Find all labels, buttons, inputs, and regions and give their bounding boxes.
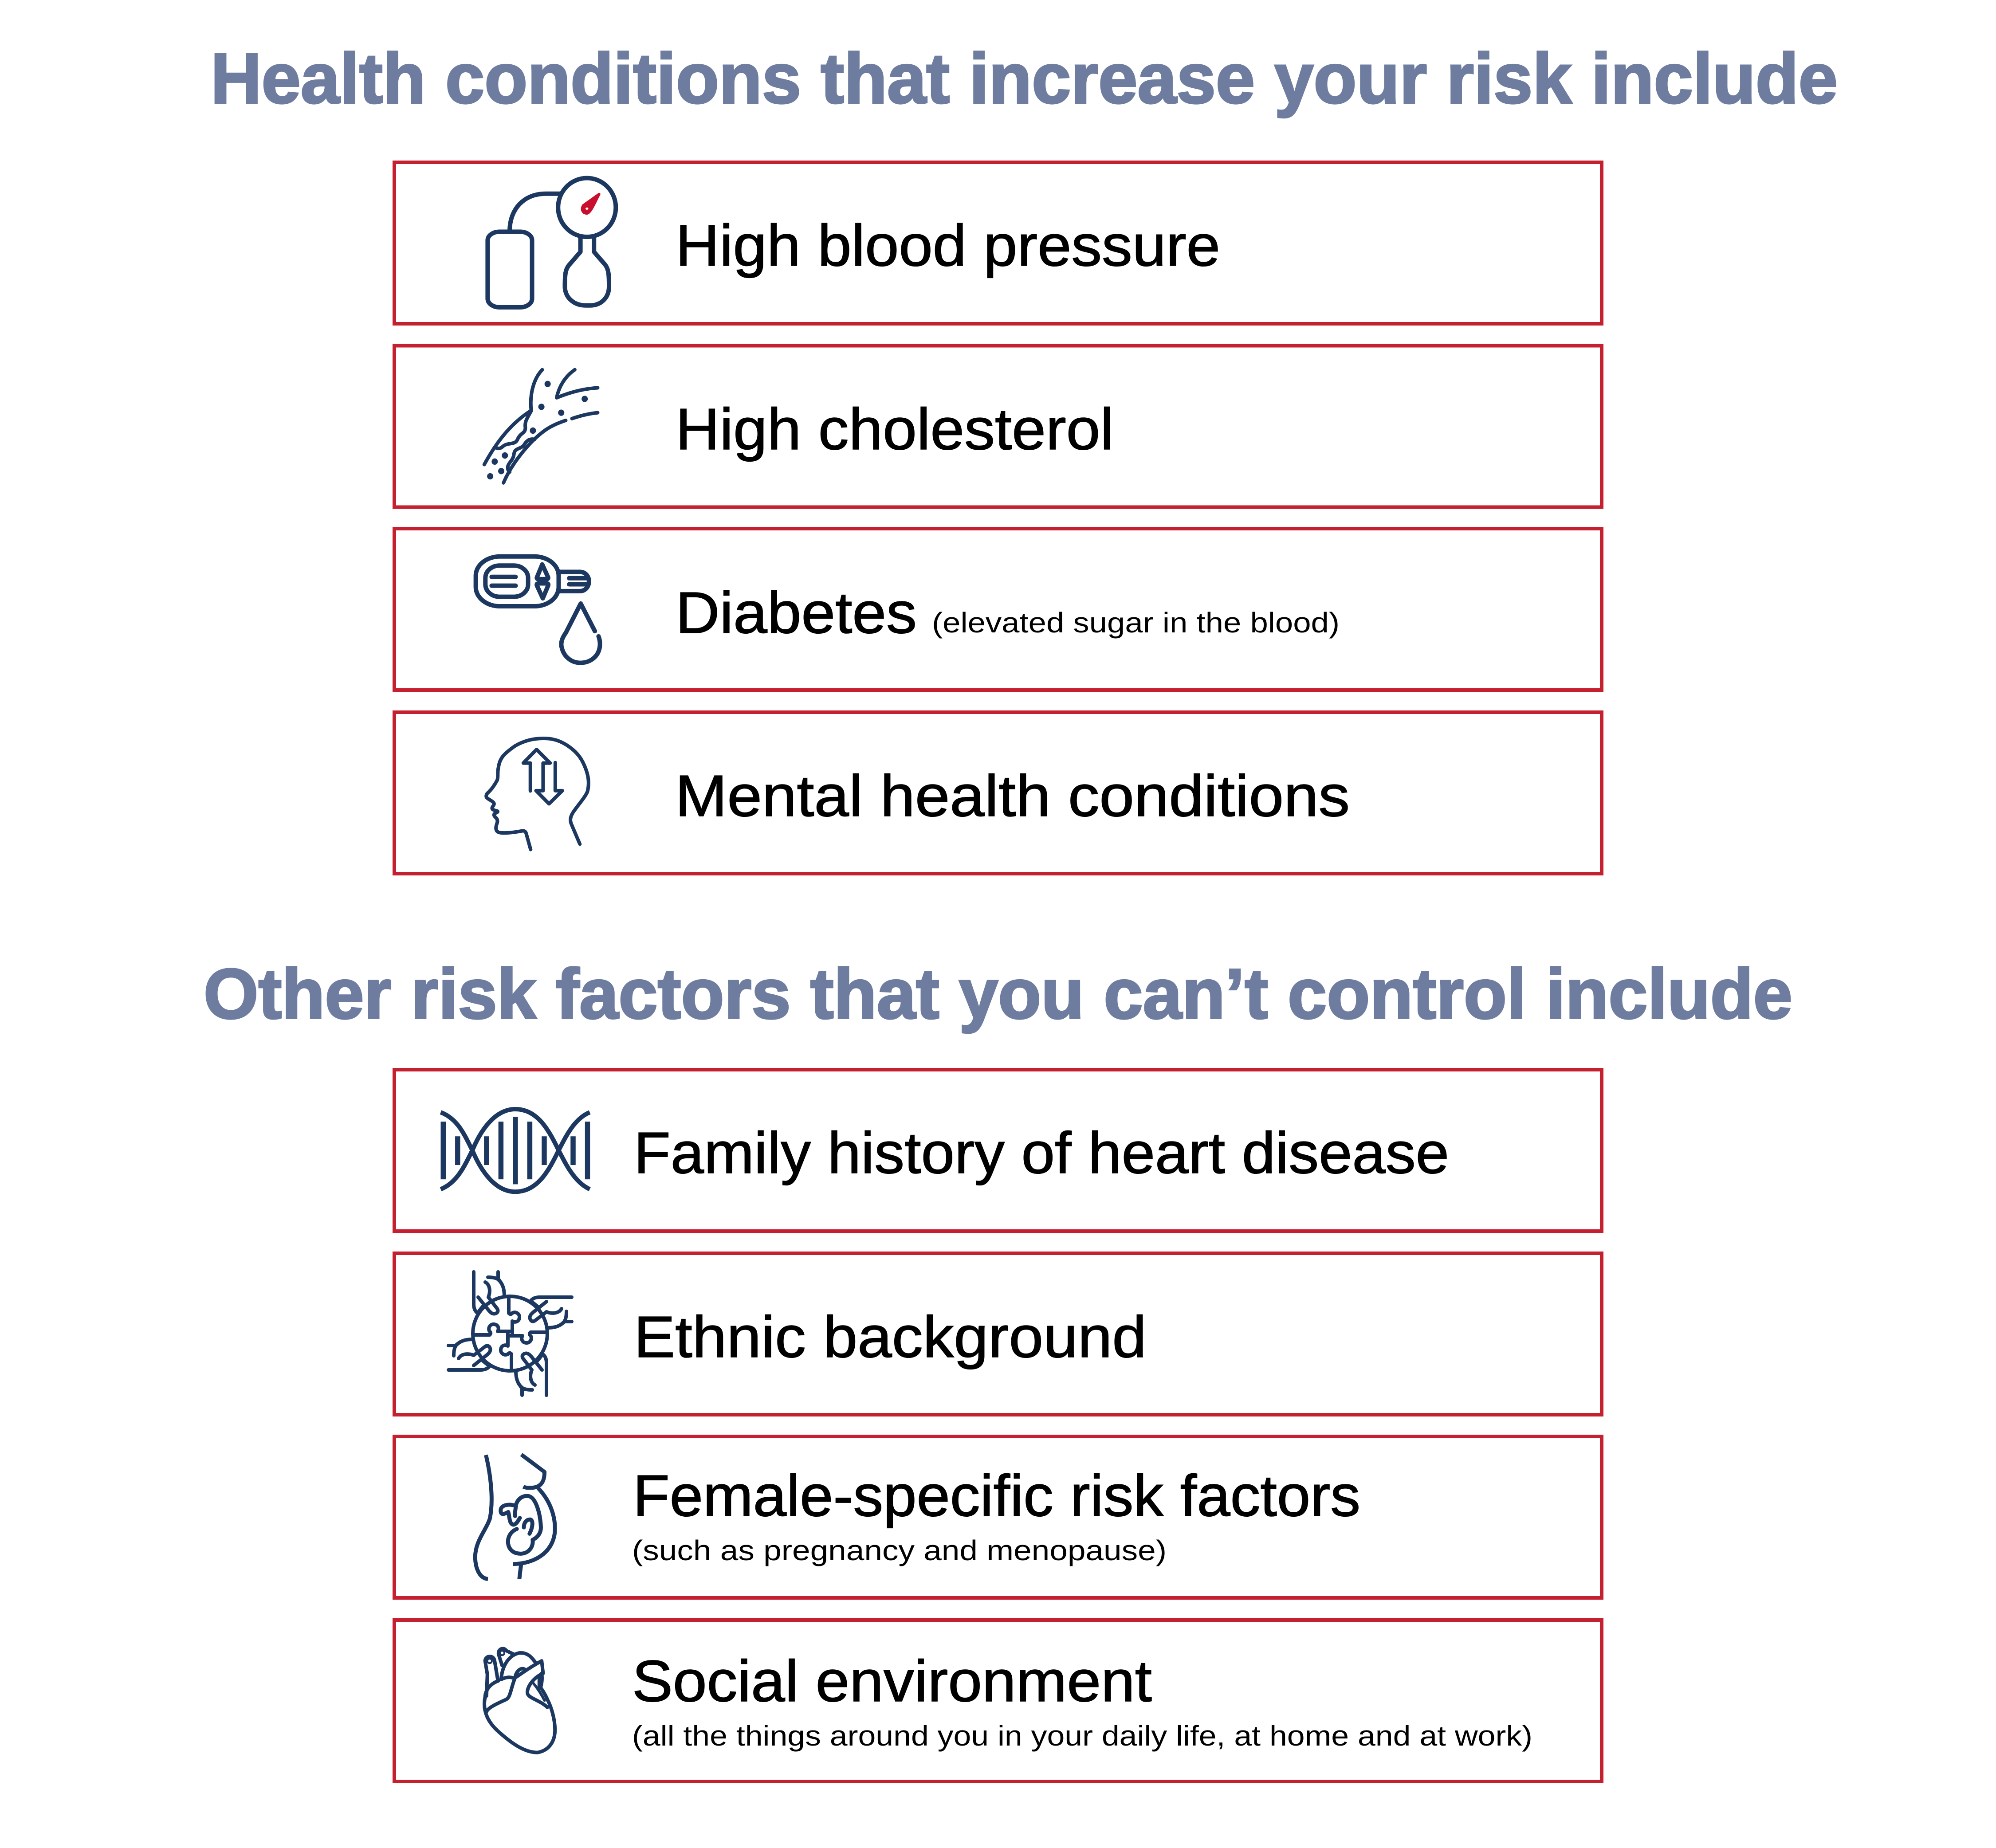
label: Ethnic background (634, 1304, 1147, 1369)
panel: diabetes (394, 529, 1602, 690)
icon: hands holding puzzle globe (448, 1272, 572, 1395)
label: Social environment (632, 1648, 1152, 1714)
label: High blood pressure (676, 213, 1220, 278)
panel: female-specific risk factors (394, 1436, 1602, 1598)
icon: blood pressure cuff and gauge (487, 178, 616, 307)
panel border (394, 1070, 1602, 1231)
icon: head with up and down arrows (486, 738, 589, 850)
label: Mental health conditions (675, 763, 1350, 828)
panel border (394, 712, 1602, 874)
icon: anatomical heart (484, 1648, 555, 1753)
note: (elevated sugar in the blood) (932, 607, 1340, 639)
icon: pregnant torso with fetus (475, 1455, 555, 1579)
label: Diabetes (676, 580, 917, 645)
heading: other risk factors: Other risk factors that you can’t control include (204, 954, 1792, 1033)
panel border (394, 529, 1602, 690)
label: Female-specific risk factors (633, 1463, 1360, 1528)
panel: ethnic background (394, 1253, 1602, 1415)
panel border (394, 1253, 1602, 1415)
icon: glucose meter and blood drop (476, 557, 600, 663)
icon: artery with plaque (484, 370, 598, 483)
note: (such as pregnancy and menopause) (632, 1534, 1167, 1566)
panel border (394, 162, 1602, 324)
panel: family history (394, 1070, 1602, 1231)
panel: high blood pressure (394, 162, 1602, 324)
panel border (394, 346, 1602, 507)
panel: social environment (394, 1620, 1602, 1781)
label: Family history of heart disease (634, 1120, 1449, 1185)
heading: health conditions: Health conditions that increase your risk include (211, 39, 1838, 118)
note: (all the things around you in your daily life, at home and at work) (632, 1720, 1532, 1752)
panel border (394, 1620, 1602, 1781)
panel: mental health conditions (394, 712, 1602, 874)
panel border (394, 1436, 1602, 1598)
panel: high cholesterol (394, 346, 1602, 507)
icon: DNA helix (441, 1109, 590, 1192)
label: High cholesterol (676, 396, 1114, 462)
